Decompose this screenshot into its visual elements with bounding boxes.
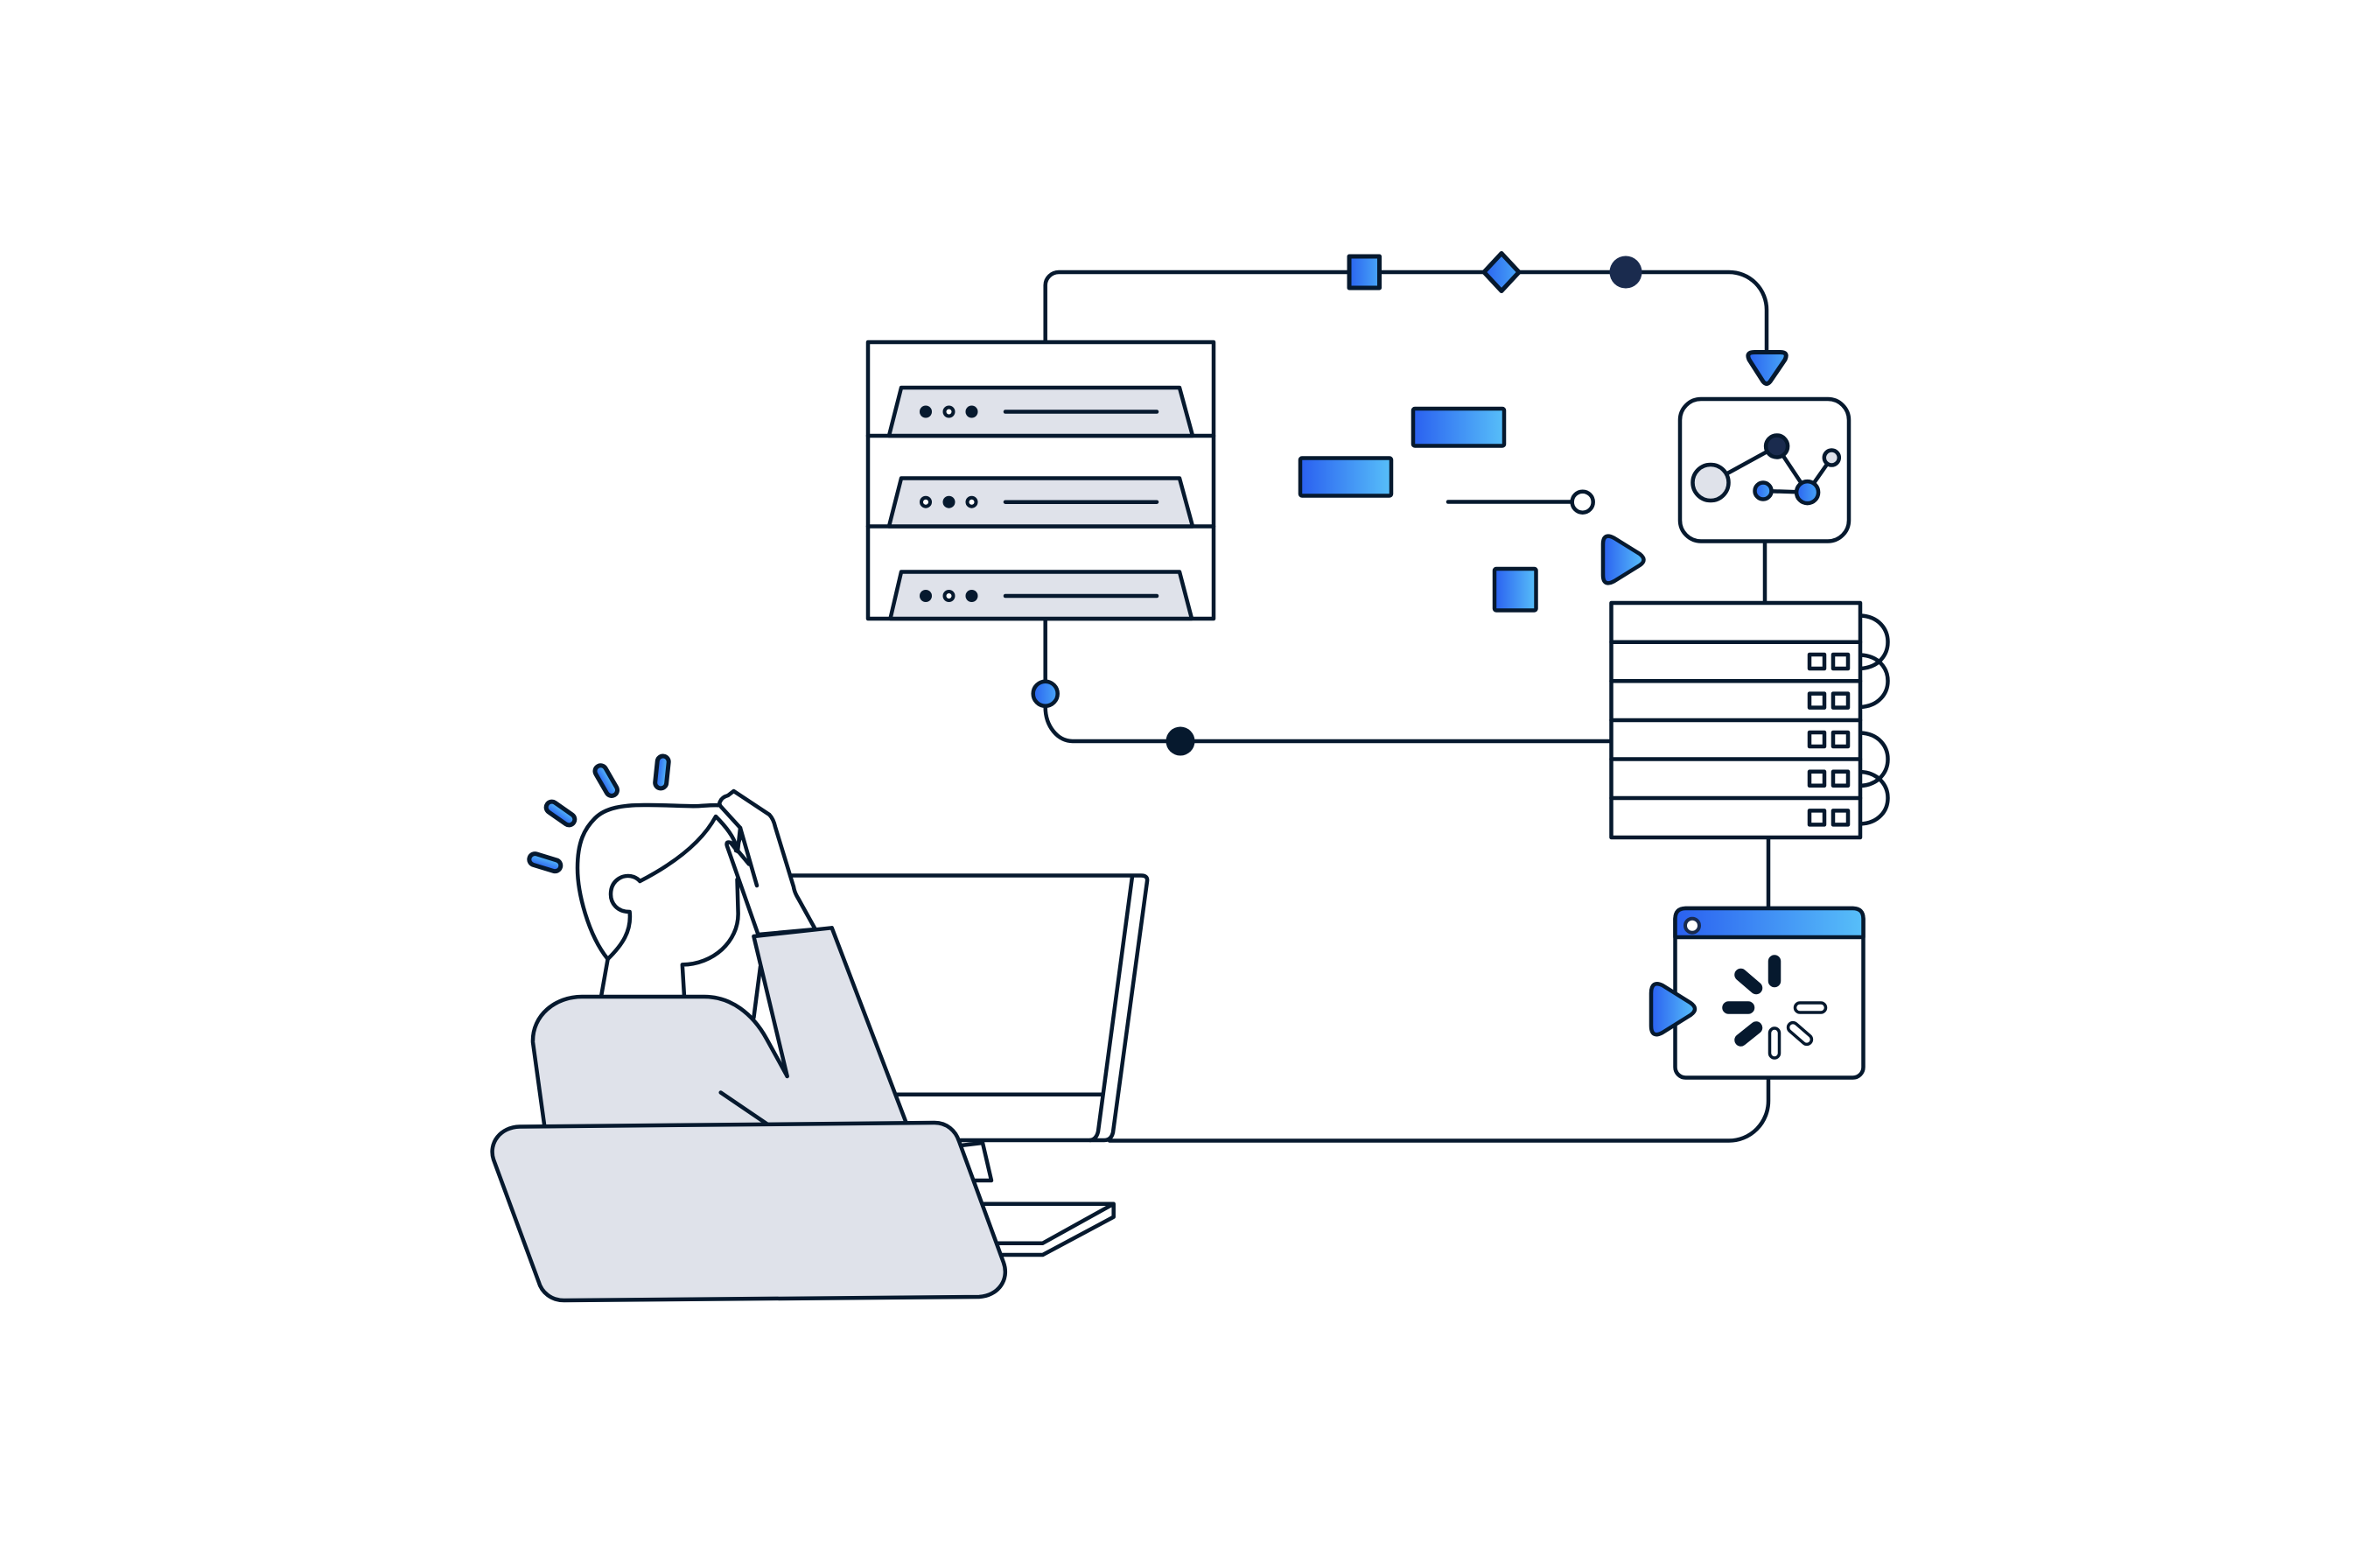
floating block: blue square [1494,569,1536,611]
person head and hair [578,805,738,997]
shelf frame [868,342,1214,619]
connector: rack to window [1767,837,1770,907]
sleeve crease [721,1092,767,1124]
person inner arm line [753,967,760,1018]
node: dark circle on bottom line [1166,726,1195,756]
panel: graph box [1680,399,1849,541]
person [493,791,1005,1300]
panel: loading window [1675,908,1864,1078]
network graph icon [1692,436,1839,503]
monitor screen [792,875,1147,1140]
arrowhead: blue triangle pointing down [1748,352,1786,383]
node: blue diamond on top line [1484,254,1519,291]
loading spinner [1729,961,1825,1058]
server unit 3 [891,572,1192,619]
monitor [792,875,1147,1255]
floating block: blue rectangle lower [1300,459,1391,495]
rack cable loops [1860,616,1888,824]
window control dot [1685,919,1699,933]
person torso [533,997,875,1129]
floating block: blue rectangle upper [1413,409,1504,446]
node: blue circle on bottom line [1033,682,1058,706]
connector: window to monitor [1110,1077,1768,1141]
connector: bottom pipeline to rack [1046,619,1611,741]
connector: graph box to rack [1763,541,1767,603]
window title bar [1675,908,1864,937]
monitor stand [961,1143,991,1180]
triangle: blue play beside window [1651,984,1695,1034]
panel: server shelf [868,342,1214,619]
server unit 2 [889,478,1193,527]
connector: top pipeline [1046,272,1767,354]
person sleeve [753,928,906,1124]
monitor base [984,1204,1114,1255]
monitor chin line [892,1092,1102,1096]
floating line with open ring [1448,492,1593,513]
floating triangle: blue play [1603,536,1643,583]
person raised hand [719,791,816,935]
rack port indicators [1810,655,1848,824]
server unit 1 [889,388,1193,436]
stress marks [528,755,669,872]
node: blue square on top line [1349,256,1379,288]
node: dark circle on top line [1610,256,1642,289]
panel: server rack [1612,603,1860,837]
laptop [493,1123,1005,1300]
